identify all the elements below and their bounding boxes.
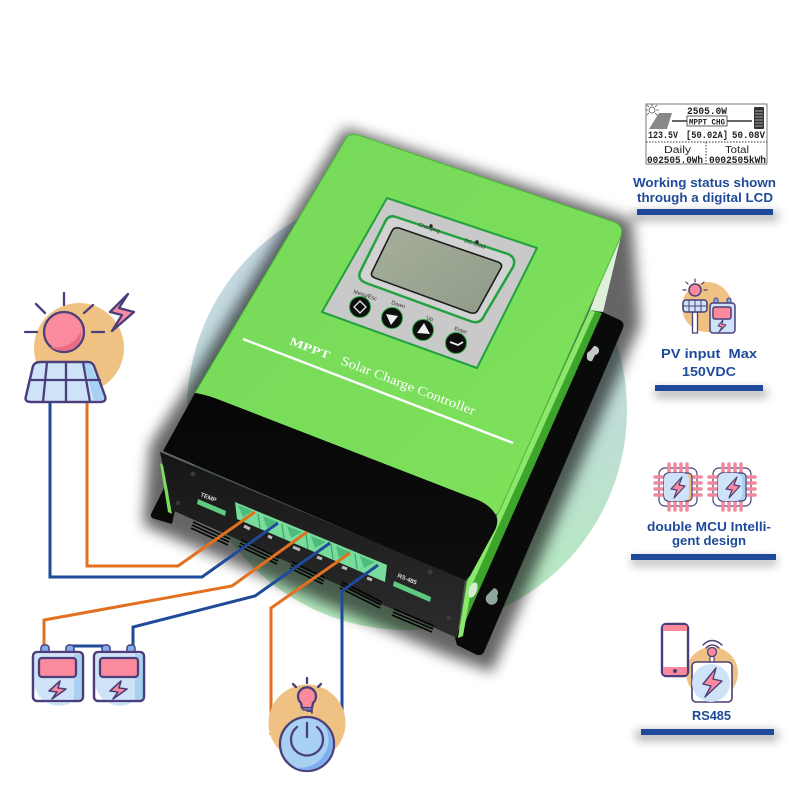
button: down	[382, 308, 402, 328]
RS-485 connector	[393, 573, 431, 602]
control panel: Charging	[417, 222, 440, 235]
port marks	[244, 526, 372, 580]
icon: chip one	[655, 464, 701, 510]
left mounting flange	[151, 488, 176, 524]
underline bar	[655, 385, 767, 397]
device shadow	[143, 128, 640, 672]
icon: load bulb and power button	[268, 678, 346, 771]
charge controller device	[143, 128, 640, 672]
icon: chip two	[709, 464, 755, 510]
wire: battery link	[70, 644, 106, 648]
terminal block	[235, 502, 387, 582]
temp connector	[197, 492, 226, 516]
white stripe	[243, 339, 513, 443]
black front hood	[163, 393, 497, 581]
screws	[190, 472, 196, 476]
icon: solar panel and battery	[682, 279, 735, 333]
ventilation slots	[191, 522, 434, 632]
indicators	[429, 224, 433, 228]
right mounting flange	[455, 311, 624, 655]
icon: solar panel and sun	[25, 293, 134, 402]
product label: MPPT	[288, 336, 332, 362]
control panel: Menu/Esc	[352, 289, 378, 303]
panel glyph	[649, 113, 672, 129]
caption: gent design	[672, 533, 746, 548]
feature: RS485	[636, 624, 778, 740]
wire: solar positive orange	[87, 402, 255, 566]
temp connector: TEMP	[199, 492, 217, 504]
front panel	[160, 452, 465, 638]
underline bar	[632, 209, 778, 220]
caption: 150VDC	[682, 364, 737, 379]
caption	[647, 519, 771, 548]
LCD readout: 002505.0Wh	[647, 155, 703, 167]
left green edge	[160, 463, 172, 514]
LCD readout: 50.08V	[732, 131, 765, 142]
sun glyph	[646, 104, 659, 116]
LCD readout: 2505.0W	[687, 107, 727, 118]
button: enter	[446, 332, 466, 354]
background circle	[187, 190, 627, 630]
green top cover	[195, 134, 622, 514]
wire: battery positive orange	[44, 532, 307, 646]
wire: battery negative blue	[133, 543, 330, 646]
underline bar	[631, 554, 777, 565]
RS-485 connector: RS-485	[396, 573, 418, 587]
caption	[633, 175, 776, 205]
caption: through a digital LCD	[637, 190, 773, 205]
icon: phone and wireless device	[662, 624, 738, 702]
product label	[288, 336, 479, 418]
icon: battery two	[94, 645, 144, 706]
caption: PV input Max	[661, 346, 758, 361]
LCD readout: 123.5V	[648, 131, 678, 142]
control panel: Up	[425, 315, 434, 323]
button: up	[412, 320, 434, 340]
LCD readout: MPPT CHG	[689, 118, 725, 128]
caption: RS485	[692, 708, 731, 723]
button: menu	[350, 296, 370, 318]
feature: LCD status	[632, 104, 778, 220]
feature: PV input	[655, 279, 767, 397]
control panel: Down	[390, 300, 406, 310]
LCD readout: Daily	[664, 145, 691, 156]
icon: battery one	[33, 645, 83, 706]
caption: double MCU Intelli-	[647, 519, 771, 534]
control panel: Enter	[453, 326, 468, 336]
caption	[661, 346, 758, 379]
green side strip	[458, 232, 622, 638]
underline bar	[636, 729, 778, 740]
control panel: DC Load	[463, 238, 486, 251]
wire: load negative blue	[342, 565, 378, 712]
wire: solar negative blue	[50, 402, 278, 577]
screen surround	[359, 216, 514, 322]
wire: load positive orange	[271, 553, 350, 735]
LCD readout	[646, 104, 767, 167]
battery glyph	[754, 107, 764, 129]
caption: Working status shown	[633, 175, 776, 190]
LCD readout: Total	[725, 145, 749, 156]
LCD screen	[371, 228, 502, 313]
control panel	[322, 198, 537, 368]
LCD readout: [50.02A]	[686, 130, 728, 142]
LCD readout: 0002505kWh	[709, 155, 766, 167]
feature: double MCU	[631, 464, 777, 565]
product label: Solar Charge Controller	[339, 353, 479, 418]
